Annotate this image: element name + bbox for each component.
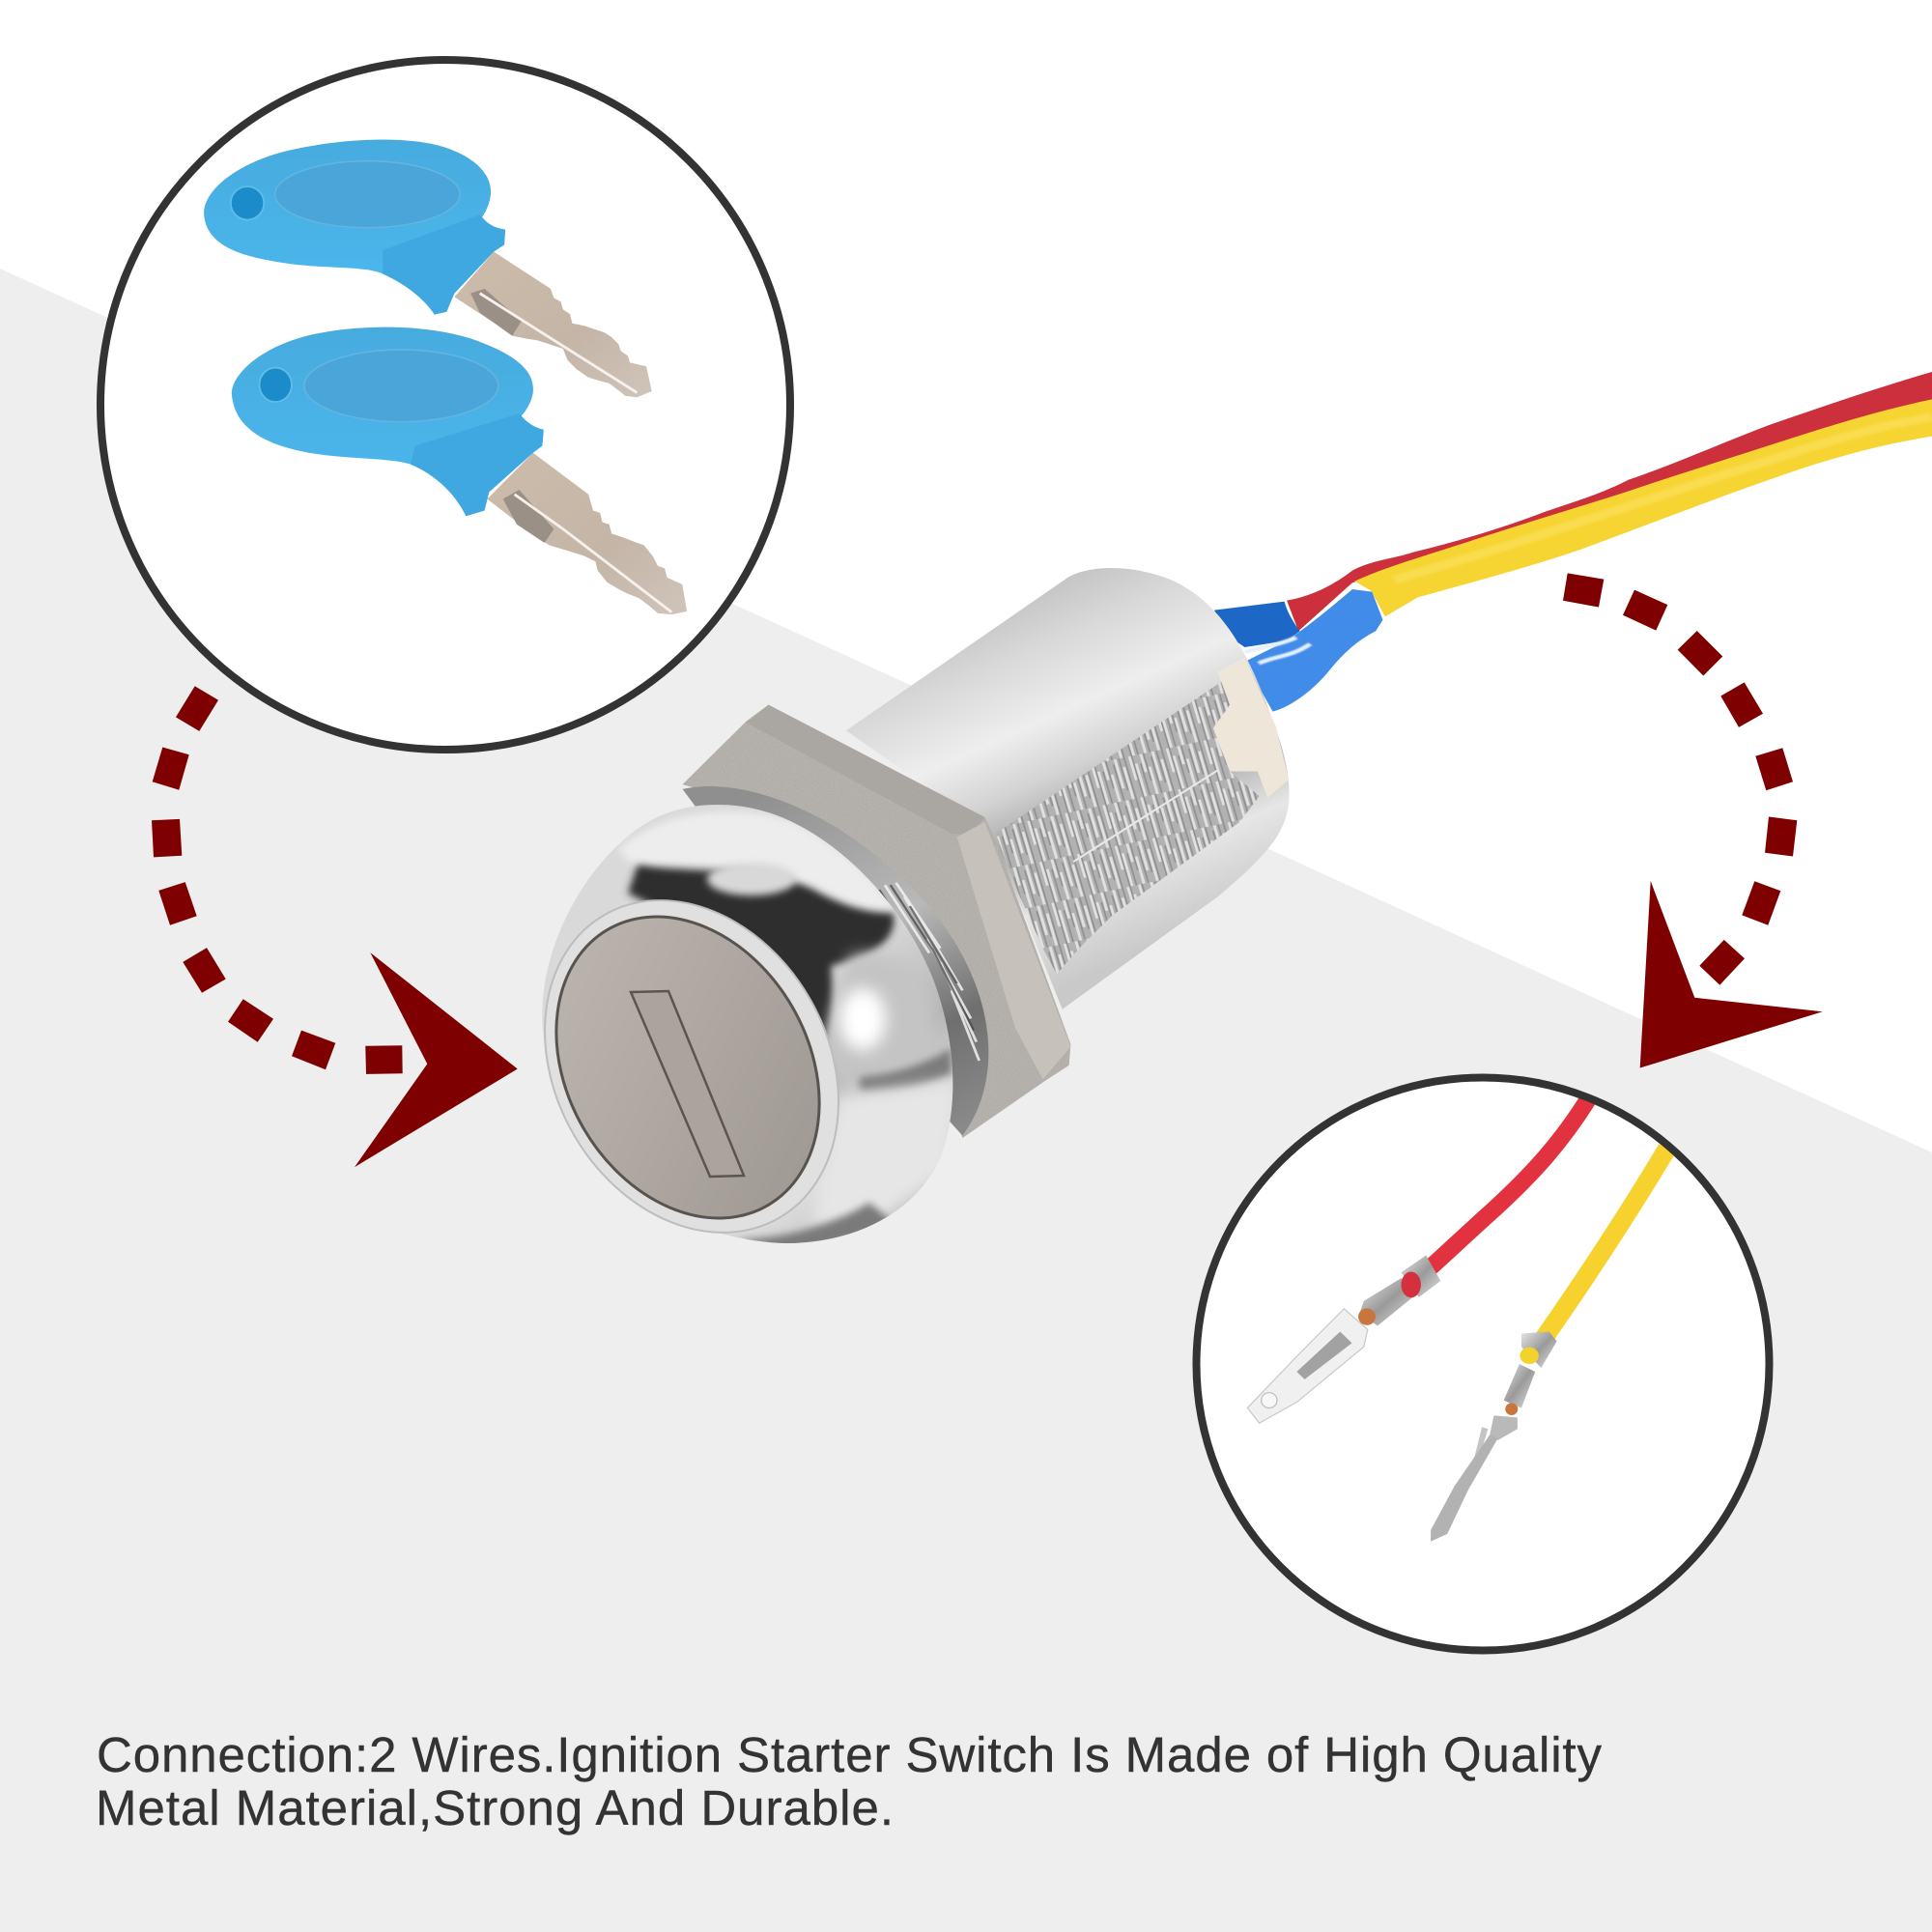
key 1 blade <box>454 252 652 397</box>
mid gray shading <box>820 943 933 1086</box>
key 1 hole <box>231 186 264 220</box>
light blue sleeve <box>1244 589 1382 712</box>
red wire <box>1287 372 1932 631</box>
red copper strands <box>1358 1308 1376 1325</box>
circle outline <box>1196 1078 1770 1650</box>
red terminal slot <box>1296 1331 1352 1379</box>
nut shaded edge <box>957 822 1070 1079</box>
caption line 2: Metal Material,Strong And Durable. <box>96 1780 894 1835</box>
key 1 neck <box>383 214 505 315</box>
key 1 oval <box>275 161 460 228</box>
thread dark streaks <box>879 885 974 1031</box>
cylinder body <box>846 568 1290 1009</box>
circle background <box>1196 1078 1770 1650</box>
dark blue sleeve <box>1214 602 1300 647</box>
circle background <box>100 60 790 750</box>
red terminal crimp ring <box>1402 1255 1440 1297</box>
caption text <box>96 1727 1602 1835</box>
thread streaks <box>874 883 980 1061</box>
sleeve highlight <box>1244 638 1310 664</box>
white blob highlight <box>839 988 886 1050</box>
threaded ring <box>683 786 988 1136</box>
yellow copper strands <box>1505 1403 1518 1415</box>
dome reflections <box>618 811 956 1256</box>
terminals drawing <box>1247 1099 1667 1542</box>
dark reflection <box>628 865 895 1063</box>
bright rim around face <box>486 847 897 1286</box>
key cylinder face <box>503 869 872 1265</box>
key 2 groove <box>503 490 554 543</box>
key 2 blade <box>487 453 687 614</box>
yellow terminal crimp ring <box>1521 1331 1557 1368</box>
nut top face <box>747 705 984 835</box>
yellow wire highlight <box>1395 417 1932 580</box>
yellow terminal arm <box>1466 1427 1488 1490</box>
bottom shadow <box>738 1200 891 1243</box>
circle outline <box>100 60 790 750</box>
light oval reflection <box>707 863 796 895</box>
yellow wire <box>1354 399 1932 616</box>
hex nut <box>683 705 1070 1138</box>
key 1 blade highlight <box>480 294 637 392</box>
groove line <box>1073 771 1217 862</box>
red insulation dot <box>1402 1271 1421 1297</box>
yellow wire end <box>1543 1149 1667 1339</box>
dotted arrow: wires to terminals <box>1563 573 1823 1068</box>
yellow insulation dot <box>1520 1348 1539 1364</box>
wires: red and yellow cable leaving the switch <box>1214 372 1932 712</box>
brushed flat side of cylinder <box>996 680 1260 974</box>
lower light band <box>811 1082 956 1227</box>
key 1 handle <box>204 140 505 315</box>
circle panel: two blue keys <box>100 60 790 750</box>
red terminal blade <box>1247 1309 1368 1423</box>
key 2 oval <box>304 350 498 422</box>
yellow terminal tab <box>1490 1415 1518 1440</box>
red wire end <box>1425 1099 1588 1272</box>
key 2 blade highlight <box>515 495 671 612</box>
key 1 <box>204 140 652 397</box>
circle panel: wire terminals <box>1196 1078 1770 1650</box>
yellow terminal barrel <box>1504 1364 1535 1407</box>
key 2 <box>232 327 687 614</box>
keys drawing <box>204 140 687 614</box>
white top streak <box>618 811 898 923</box>
key 2 neck <box>411 413 544 516</box>
dotted arrow: keys to switch <box>152 686 518 1167</box>
main product: ignition switch lock cylinder <box>543 568 1289 1243</box>
key 2 handle <box>232 327 544 516</box>
dome base <box>542 805 952 1243</box>
caption line 1: Connection:2 Wires.Ignition Starter Switch Is Made of High Quality <box>97 1727 1602 1782</box>
chrome dome head <box>543 805 952 1243</box>
switch body in source coordinates <box>683 568 1290 1138</box>
key 1 groove <box>470 289 522 336</box>
lower smile shadow <box>860 1048 952 1092</box>
key 2 hole <box>259 368 292 402</box>
red terminal hole <box>1262 1393 1277 1407</box>
white plastic insert <box>1213 657 1289 798</box>
yellow terminal strip <box>1431 1435 1497 1542</box>
key slot <box>631 991 744 1177</box>
red terminal barrel <box>1360 1278 1415 1326</box>
